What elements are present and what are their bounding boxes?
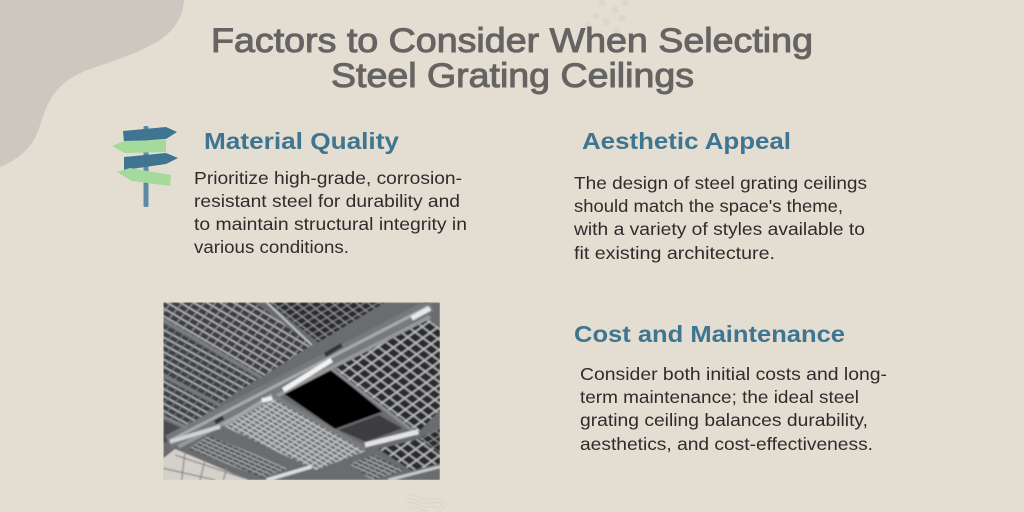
photo: steel grating ceiling: [163, 302, 440, 480]
text block: material quality: [194, 168, 467, 257]
panel: aesthetic appeal: [573, 128, 867, 263]
text block: cost and maintenance: aesthetics, and cost-effectiveness.: [580, 434, 873, 454]
title: Steel Grating Ceilings: [331, 57, 694, 95]
title: [211, 22, 813, 95]
text block: material quality: various conditions.: [194, 237, 349, 257]
text block: cost and maintenance: term maintenance; the ideal steel: [580, 387, 859, 407]
title: Factors to Consider When Selecting: [211, 22, 813, 60]
text block: cost and maintenance: grating ceiling balances durability,: [580, 410, 868, 430]
text block: cost and maintenance: Consider both initial costs and long-: [580, 364, 887, 384]
heading: material quality: Material Quality: [204, 128, 399, 154]
panel: cost and maintenance: [574, 321, 887, 454]
decorative corner blob: [0, 0, 184, 167]
text block: aesthetic appeal: fit existing architecture.: [574, 243, 775, 263]
text block: aesthetic appeal: The design of steel grating ceilings: [574, 173, 867, 193]
text block: aesthetic appeal: with a variety of styles available to: [573, 219, 865, 239]
icon: signpost: [112, 126, 178, 207]
faint wave pattern: [406, 494, 446, 512]
heading: cost and maintenance: Cost and Maintenance: [574, 321, 845, 347]
text block: aesthetic appeal: should match the space's theme,: [574, 196, 843, 216]
text block: material quality: to maintain structural integrity in: [194, 214, 467, 234]
text block: material quality: Prioritize high-grade, corrosion-: [194, 168, 462, 188]
text block: aesthetic appeal: [573, 173, 867, 263]
text block: cost and maintenance: [580, 364, 887, 454]
faint dot pattern: [585, 0, 629, 33]
text block: material quality: resistant steel for durability and: [194, 191, 460, 211]
panel: material quality: [194, 128, 467, 257]
heading: aesthetic appeal: Aesthetic Appeal: [582, 128, 791, 154]
